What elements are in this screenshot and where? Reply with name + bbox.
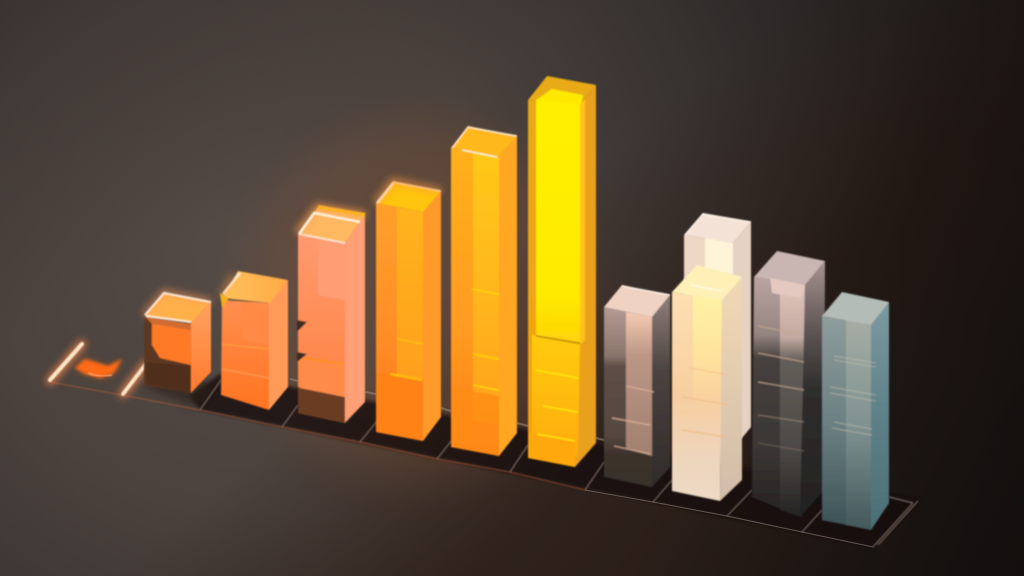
bar 4 [376,181,441,441]
empty first slot with glowing markers [50,344,146,394]
bar 3 [297,207,365,423]
bar 1 [144,292,211,393]
small orange flat bar [75,359,122,378]
bar 11: blue-grey bar [822,292,889,530]
bar 7: grey-peach bar [604,285,670,487]
cell dividers [200,380,918,547]
bar 8: tall white back bar [684,213,751,450]
marker: right glow bar [123,364,146,394]
back rail [290,379,604,440]
bar 5 [451,126,517,456]
floor grid [50,374,920,547]
marker: left glow bar [50,344,82,381]
dark floor cells [190,374,920,547]
bar 10: dark grey bar [752,251,825,517]
bar 2 [220,271,288,410]
front rail [50,382,585,490]
bar 6: tallest yellow bar [528,76,596,467]
bar 9: front cream bar [672,265,742,501]
